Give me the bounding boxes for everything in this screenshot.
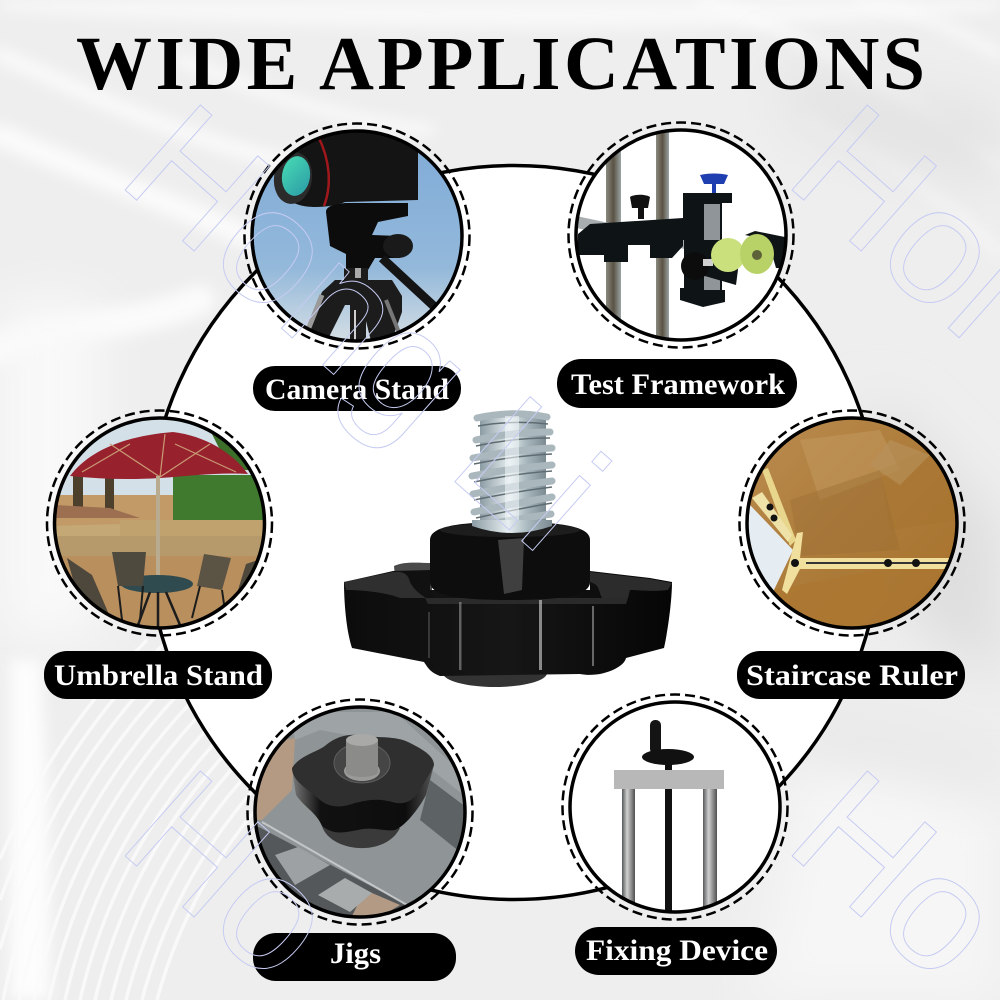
table (121, 575, 193, 593)
slats (275, 847, 330, 885)
gloss highlights (428, 538, 594, 670)
lens red ring (318, 136, 329, 206)
rear leg (382, 258, 438, 310)
photo: patio umbrella (47, 410, 272, 640)
wing top faces (344, 572, 426, 598)
planters and steps (56, 524, 120, 536)
shadowed lower tray (255, 825, 407, 920)
big white circle with outline (147, 166, 881, 900)
frame rings (255, 707, 465, 917)
frame rings (252, 131, 462, 341)
photo: jig knob on track (248, 700, 472, 924)
label: Staircase Ruler: Staircase Ruler (746, 659, 958, 692)
bearing (334, 743, 390, 783)
photo: staircase ruler on wood (740, 410, 964, 636)
white step (745, 505, 793, 592)
front plate (704, 268, 738, 285)
tripod head (326, 203, 408, 270)
label: Staircase Ruler (737, 651, 965, 699)
central cylinder (430, 522, 590, 600)
small knob (630, 195, 650, 219)
label: Umbrella Stand (44, 651, 272, 699)
knob top (292, 735, 434, 806)
columns (622, 789, 635, 914)
right track (420, 780, 464, 849)
label: Umbrella Stand: Umbrella Stand (54, 659, 263, 692)
head knob (383, 234, 413, 258)
umbrella canopy (70, 432, 248, 479)
rear arm (745, 231, 784, 268)
label: Test Framework: Test Framework (571, 368, 785, 401)
photo: fixing device press (562, 694, 788, 920)
tan table left (256, 738, 295, 820)
upper rail (294, 712, 462, 793)
photo: test framework (568, 122, 794, 350)
vertical rods (606, 151, 621, 319)
clamp block (680, 193, 732, 307)
tripod collar and legs (311, 268, 402, 340)
star knob body (344, 570, 672, 676)
handle (650, 720, 661, 754)
lens glass (274, 152, 312, 204)
trees (173, 475, 265, 520)
label: Camera Stand (253, 366, 461, 411)
yellow rollers (711, 238, 745, 272)
label: Test Framework (557, 359, 797, 408)
label: Fixing Device (575, 927, 777, 975)
crossbar (614, 770, 724, 789)
ruler (782, 532, 955, 594)
chairs (112, 552, 146, 586)
threaded stud (472, 414, 552, 532)
dome (322, 826, 400, 848)
frame rings (576, 130, 786, 340)
bolt (346, 740, 378, 772)
frame rings (54, 418, 264, 628)
side knob (681, 252, 709, 280)
frame rings (747, 418, 957, 628)
plate edge (262, 822, 407, 905)
blue screw (700, 174, 728, 193)
camera and lens (294, 132, 418, 207)
label: Jigs (253, 933, 456, 981)
pole (156, 476, 160, 584)
knob side (292, 765, 434, 832)
product: plastic star knob with threaded stud (344, 414, 672, 687)
silver tube (578, 216, 684, 249)
tan at bottom (352, 892, 400, 916)
label: Fixing Device: Fixing Device (586, 934, 768, 967)
dome underside (443, 659, 547, 687)
handwheel (642, 749, 694, 765)
ruler arms (762, 468, 796, 546)
label: Jigs: Jigs (330, 937, 381, 970)
rear wings (394, 563, 432, 590)
stripe texture lower-left (0, 640, 540, 1000)
black bar (578, 218, 683, 262)
screws (791, 559, 799, 567)
frame rings (570, 702, 780, 912)
photo: camera on tripod (244, 124, 470, 348)
title: WIDE APPLICATIONS (76, 22, 925, 106)
label: Camera Stand: Camera Stand (265, 373, 449, 406)
